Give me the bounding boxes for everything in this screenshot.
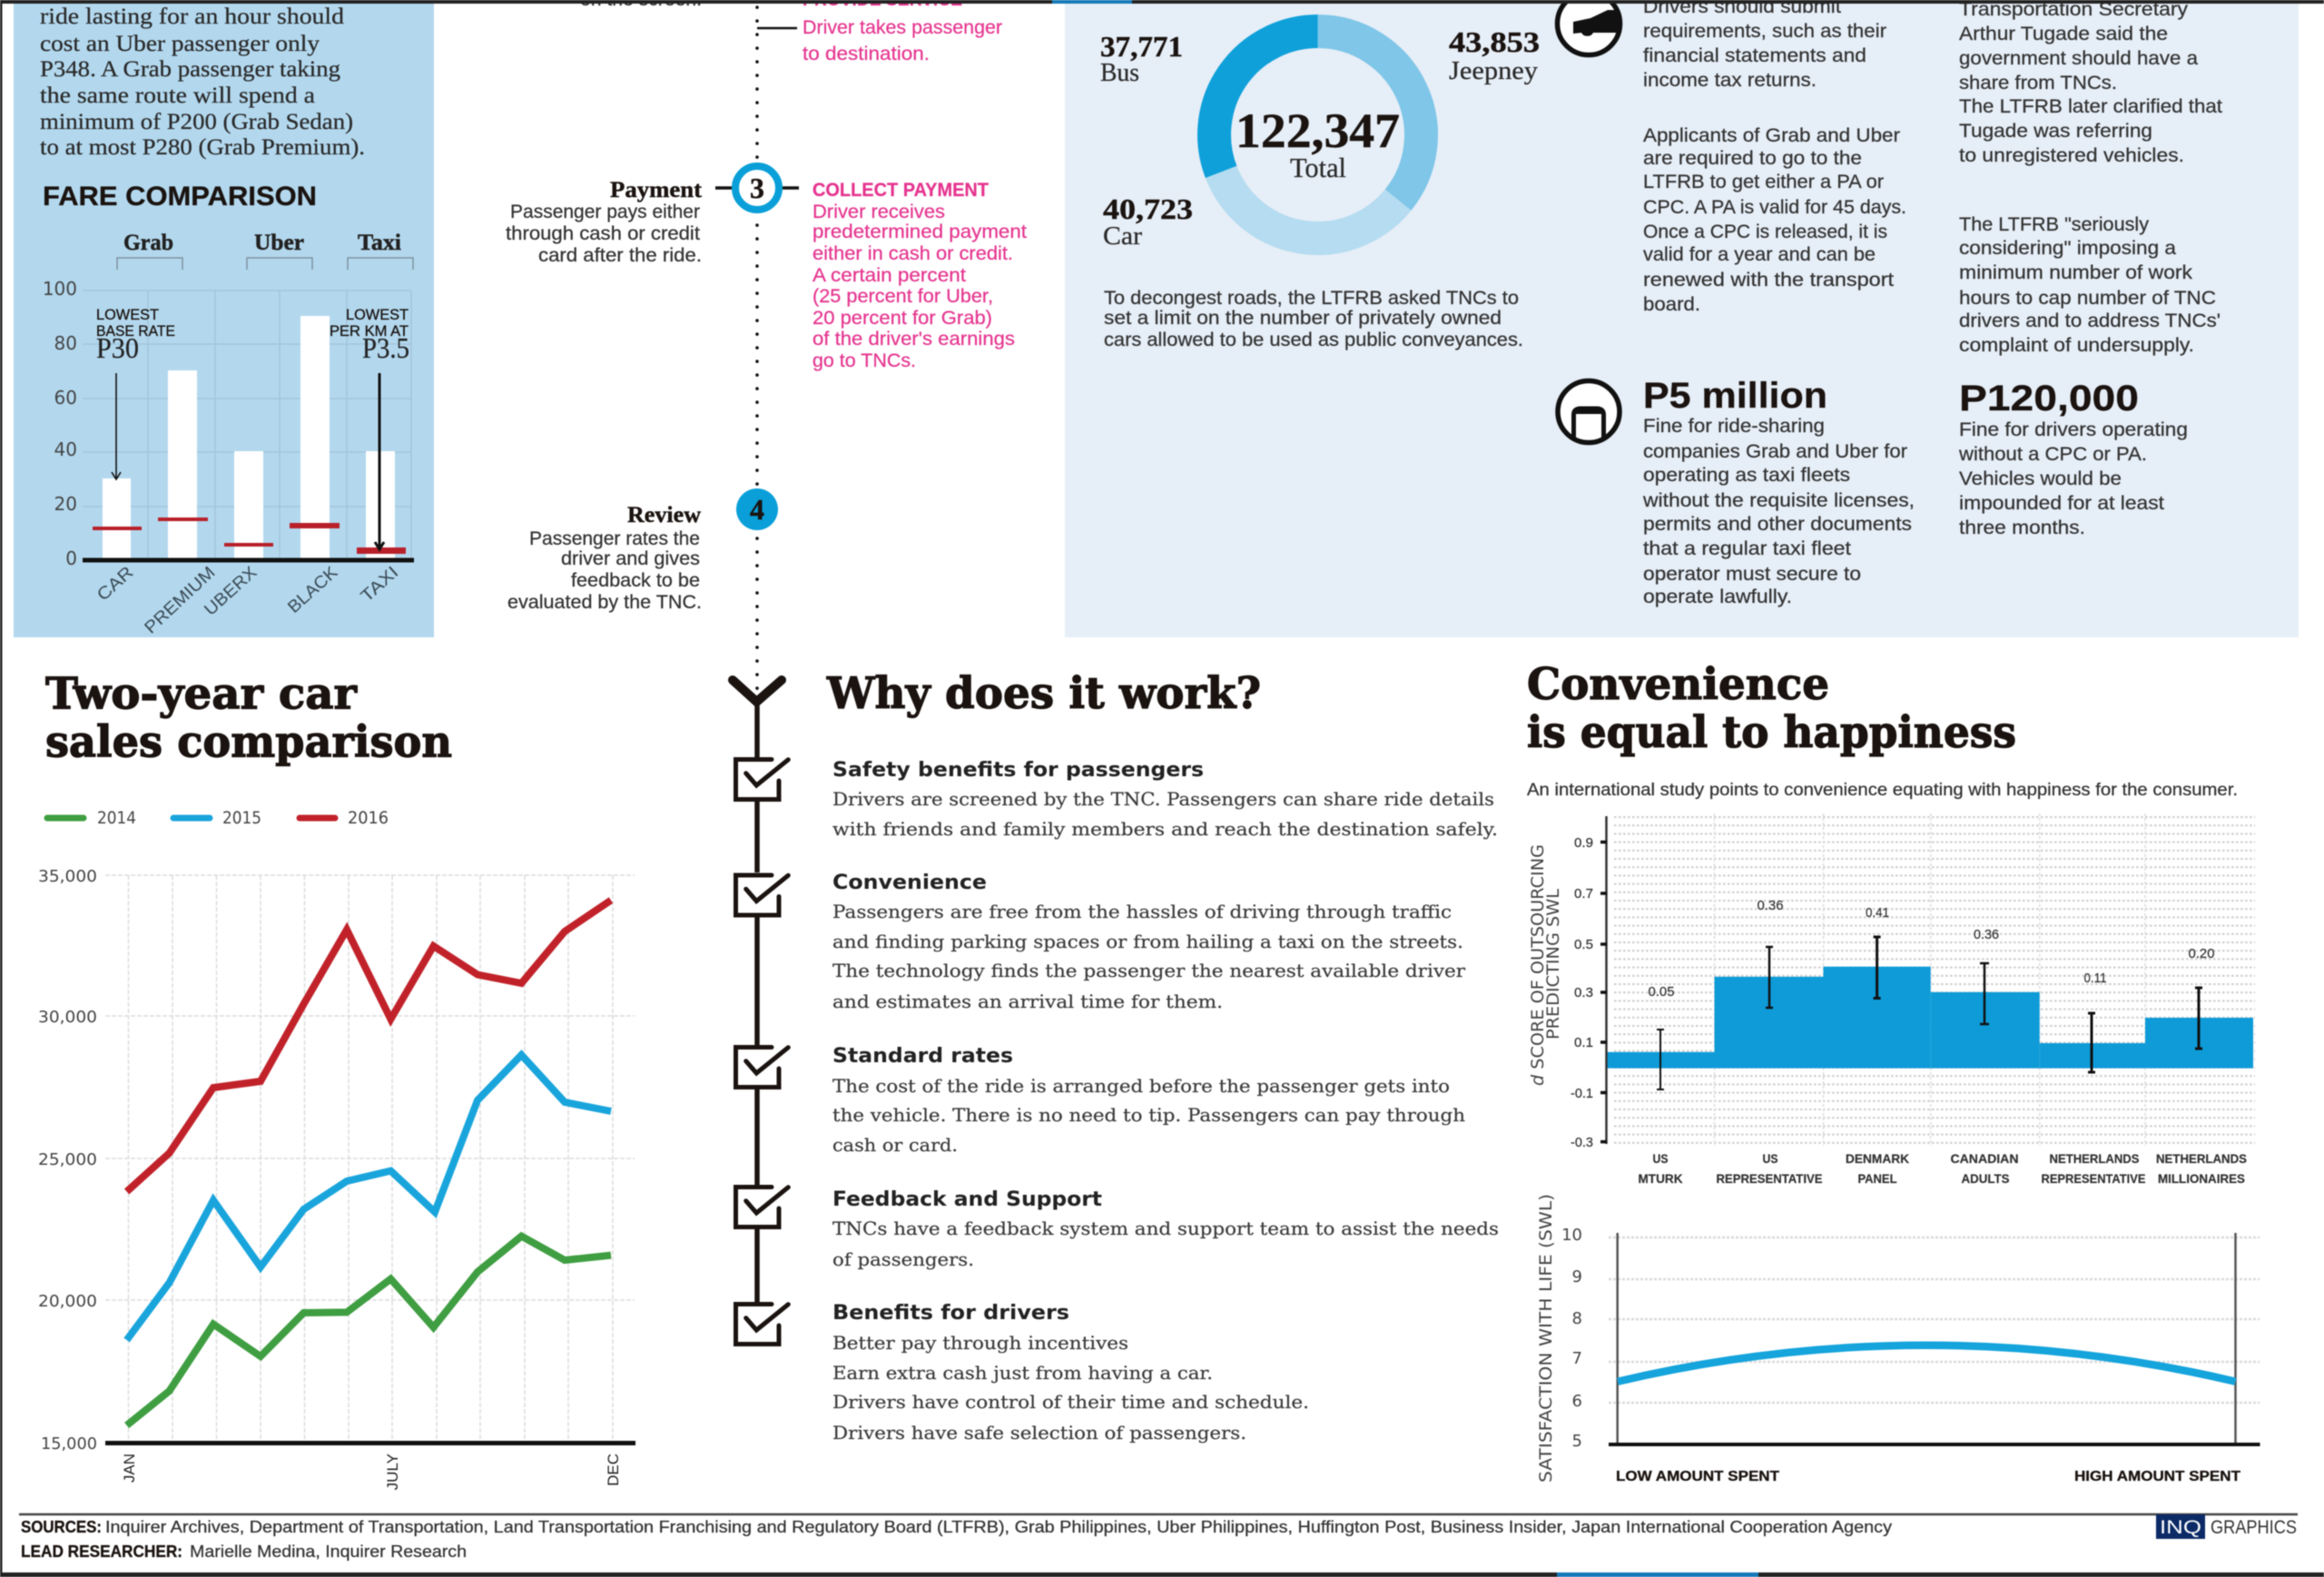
line chart: satisfaction with life: LOW AMOUNT SPENT [1616, 1469, 1779, 1484]
text: collect payment: 20 percent for Grab) [812, 308, 992, 329]
line chart: satisfaction with life [1536, 1194, 2260, 1484]
text: P5 million fine: companies Grab and Uber for [1643, 441, 1907, 462]
text: study intro: An international study points to convenience equating with happiness for the consumer. [1527, 781, 2238, 800]
text: review: driver and gives [561, 548, 700, 569]
text: standard rates: Standard rates [832, 1045, 1013, 1068]
bar chart: outsourcing score: CANADIAN [1950, 1151, 2019, 1166]
text: P120,000 fine: P120,000 [1959, 379, 2139, 419]
text: decongest roads: cars allowed to be used as public conveyances. [1104, 330, 1523, 350]
text: government share: The LTFRB "seriously [1959, 214, 2150, 235]
line chart: car sales: 25,000 [38, 1150, 97, 1169]
text: collect payment: predetermined payment [812, 222, 1027, 242]
text: government share: drivers and to address TNCs' [1959, 310, 2221, 331]
icon: check 5 [735, 1304, 788, 1344]
text: fare explanation: minimum of P200 (Grab Sedan) [40, 110, 353, 134]
bar chart: outsourcing score: 0.11 [2084, 971, 2106, 986]
text: convenience: and finding parking spaces or from hailing a taxi on the streets. [832, 931, 1463, 952]
bar chart: outsourcing score: 0.20 [2188, 946, 2215, 961]
text: decongest roads: To decongest roads, the LTFRB asked TNCs to [1104, 288, 1519, 309]
bar chart: fares: 100 [43, 278, 77, 300]
text: P5 million fine: without the requisite licenses, [1642, 490, 1915, 511]
bar chart: outsourcing score: REPRESENTATIVE [1716, 1171, 1823, 1186]
footer: sources: Marielle Medina, Inquirer Research [190, 1543, 467, 1561]
text: requirements: board. [1643, 294, 1700, 315]
bar chart: fares: 80 [54, 332, 77, 354]
heading: why does it work: Why does it work? [826, 668, 1261, 719]
icon: chevron and checklist spine [733, 680, 788, 1344]
text: decongest roads: set a limit on the number of privately owned [1104, 308, 1502, 329]
text: requirements: Once a CPC is released, it is [1643, 222, 1887, 242]
line chart: car sales: 20,000 [38, 1292, 97, 1311]
text: provide service: Driver takes passenger [803, 17, 1002, 38]
text: P5 million fine: P5 million [1643, 376, 1827, 416]
bar chart: outsourcing score: 0.7 [1574, 886, 1593, 902]
series: 2014 [127, 1237, 611, 1425]
bar chart: outsourcing score: MILLIONAIRES [2158, 1171, 2245, 1186]
bar chart: fares: BLACK [284, 563, 342, 617]
text: requirements: valid for a year and can be [1643, 244, 1876, 265]
bar chart: outsourcing score: US [1652, 1151, 1669, 1166]
text: P120,000 fine: three months. [1959, 517, 2085, 538]
legend: years: 2016 [348, 808, 389, 828]
text: review: Passenger rates the [529, 528, 700, 549]
bar chart: fares: UBERX [201, 563, 261, 620]
line chart: satisfaction with life: 8 [1572, 1309, 1582, 1328]
step 4 marker [736, 488, 778, 530]
bar chart: fares: CAR [94, 563, 137, 605]
bar chart: outsourcing score: 0.05 [1649, 984, 1674, 1000]
text: requirements: are required to go to the [1643, 148, 1862, 169]
bar chart: fares [43, 231, 414, 637]
text: benefits for drivers [832, 1302, 1309, 1444]
text: feedback and support: of passengers. [832, 1248, 974, 1270]
text: government share: to unregistered vehicles. [1959, 145, 2184, 166]
icon: check 3 [735, 1048, 788, 1088]
bar chart: outsourcing score: 0.5 [1574, 937, 1593, 952]
text: payment: Payment [610, 178, 703, 202]
text: fare explanation [40, 5, 365, 160]
text: review: Review [627, 503, 701, 527]
heading: convenience is equal to happiness: Convenience [1527, 659, 1829, 710]
heading: car sales [45, 668, 452, 768]
text: feedback and support [832, 1188, 1499, 1270]
line chart: car sales: JULY [384, 1454, 401, 1490]
legend: years [47, 808, 389, 828]
step 4 marker: 4 [750, 493, 764, 526]
donut chart: public vehicles: Car [1103, 222, 1142, 251]
footer: sources: LEAD RESEARCHER: [21, 1543, 182, 1561]
text: safety benefits: with friends and family members and reach the destination safely. [832, 818, 1498, 840]
footer: sources: SOURCES: [21, 1518, 102, 1536]
line chart: car sales: DEC [605, 1454, 622, 1486]
text: collect payment: COLLECT PAYMENT [812, 180, 989, 201]
line chart: satisfaction with life: 6 [1572, 1392, 1582, 1411]
bar chart: outsourcing score: REPRESENTATIVE [2041, 1171, 2146, 1186]
line chart: satisfaction with life: SATISFACTION WITH LIFE (SWL) [1536, 1194, 1556, 1483]
bar chart: outsourcing score: 0.41 [1866, 905, 1889, 921]
bar chart: outsourcing score: 0.3 [1574, 985, 1593, 1000]
bar chart: outsourcing score: DENMARK [1846, 1151, 1909, 1166]
text: collect payment: of the driver's earnings [812, 329, 1015, 350]
text: convenience [832, 872, 1465, 1012]
text: benefits for drivers: Better pay through incentives [832, 1332, 1128, 1354]
heading: convenience is equal to happiness [1527, 659, 2016, 758]
text: safety benefits [832, 759, 1498, 840]
footer: sources: Inquirer Archives, Department of Transportation, Land Transportation Franchising and Regulatory Board (LTFRB), Grab Philippines, Uber Philippines, Huffington Post, Business Insider, Japan International Cooperation Agency [105, 1518, 1892, 1536]
heading: car sales: Two-year car [45, 668, 358, 719]
text: requirements: financial statements and [1643, 45, 1866, 66]
text: benefits for drivers: Benefits for drivers [832, 1302, 1069, 1325]
text: government share: Tugade was referring [1959, 121, 2152, 142]
text: provide service [757, 0, 1002, 64]
bar chart: outsourcing score: 0.36 [1758, 898, 1783, 913]
bar chart: outsourcing score: PANEL [1857, 1171, 1897, 1186]
donut chart: public vehicles [1100, 25, 1540, 251]
icon: car side [1558, 0, 1620, 54]
text: government share: hours to cap number of TNC [1959, 288, 2216, 309]
text: P120,000 fine: Fine for drivers operating [1959, 419, 2188, 440]
line chart: car sales: JAN [121, 1454, 138, 1483]
icon: car front [1558, 381, 1620, 443]
bar chart: fares: P3.5 [362, 331, 409, 364]
text: government share: Arthur Tugade said the [1959, 24, 2168, 44]
text: P120,000 fine: impounded for at least [1959, 493, 2164, 514]
bar chart: outsourcing score: ADULTS [1961, 1171, 2010, 1186]
text: safety benefits: Drivers are screened by the TNC. Passengers can share ride details [832, 788, 1494, 810]
line chart: satisfaction with life: 7 [1572, 1349, 1582, 1368]
text: government share: The LTFRB later clarified that [1959, 96, 2222, 117]
bar chart: fares: 0 [65, 547, 77, 569]
bar chart: outsourcing score: US [1763, 1151, 1777, 1166]
bar chart: fares: LOWEST [96, 306, 159, 323]
bar chart: outsourcing score: -0.1 [1571, 1086, 1593, 1101]
text: requirements: requirements, such as their [1643, 21, 1886, 42]
bar chart: outsourcing score [1528, 813, 2255, 1186]
icon: check 1 [735, 759, 788, 799]
text: benefits for drivers: Earn extra cash just from having a car. [832, 1362, 1213, 1384]
bar chart: outsourcing score: d SCORE OF OUTSOURCING [1528, 844, 1548, 1086]
text: requirements: Applicants of Grab and Uber [1643, 125, 1900, 146]
heading: car sales: sales comparison [45, 717, 452, 768]
icon: check 4 [735, 1188, 788, 1227]
bar chart: outsourcing score: NETHERLANDS [2050, 1151, 2139, 1166]
arrow: lowest base rate [112, 373, 121, 479]
text: collect payment: (25 percent for Uber, [812, 286, 993, 307]
text: collect payment: Driver receives [812, 202, 945, 222]
bar chart: outsourcing score: 0.9 [1574, 835, 1593, 851]
legend: years: 2015 [222, 808, 261, 828]
text: convenience: and estimates an arrival time for them. [832, 991, 1223, 1012]
text: fare explanation: ride lasting for an hour should [40, 5, 345, 29]
donut chart: public vehicles: 37,771 [1100, 30, 1183, 63]
donut chart: public vehicles: 122,347 [1236, 103, 1400, 158]
step 3 marker: 3 [750, 172, 764, 204]
icon: check 2 [735, 875, 788, 915]
text: fare explanation: cost an Uber passenger only [40, 32, 320, 56]
text: P5 million fine: permits and other documents [1643, 514, 1912, 535]
bar chart: fares: Grab [123, 231, 173, 255]
bar chart: outsourcing score: NETHERLANDS [2156, 1151, 2247, 1166]
line chart: satisfaction with life: 5 [1572, 1432, 1582, 1451]
text: government share: considering" imposing a [1959, 238, 2176, 259]
text: P5 million fine: operate lawfully. [1643, 586, 1792, 607]
bar chart: outsourcing score: 0.36 [1974, 927, 1999, 942]
text: collect payment [812, 180, 1027, 371]
legend: years: 2014 [97, 808, 136, 828]
text: standard rates: The cost of the ride is arranged before the passenger gets into [832, 1075, 1450, 1097]
donut chart: public vehicles: Total [1290, 152, 1346, 183]
line chart: satisfaction with life: 9 [1572, 1267, 1582, 1286]
text: fare explanation: the same route will spend a [40, 84, 315, 108]
donut chart: public vehicles: Jeepney [1449, 56, 1539, 85]
series: 2015 [127, 1055, 611, 1340]
text: benefits for drivers: Drivers have safe selection of passengers. [832, 1422, 1246, 1444]
text: collect payment: go to TNCs. [812, 350, 916, 371]
text: benefits for drivers: Drivers have control of their time and schedule. [832, 1391, 1309, 1413]
logo: INQ Graphics: GRAPHICS [2211, 1517, 2297, 1538]
text: government share: minimum number of work [1959, 262, 2193, 283]
text: payment [506, 178, 703, 266]
bar chart: outsourcing score: MTURK [1638, 1171, 1683, 1186]
text: P120,000 fine [1958, 379, 2188, 538]
bar chart: fares: LOWEST [346, 306, 409, 323]
panel: regulation [1065, 0, 2299, 637]
bar chart: outsourcing score: PREDICTING SWL [1543, 889, 1563, 1040]
step 3 marker [715, 166, 799, 210]
heading: convenience is equal to happiness: is equal to happiness [1527, 707, 2016, 758]
text: requirements [1643, 0, 1906, 315]
line chart: satisfaction with life: HIGH AMOUNT SPENT [2074, 1469, 2240, 1484]
text: payment: through cash or credit [506, 223, 700, 244]
text: government share: government should have a [1959, 48, 2198, 69]
text: collect payment: either in cash or credit. [812, 243, 1013, 264]
arrow: lowest per km [375, 373, 384, 549]
text: government share: share from TNCs. [1959, 73, 2117, 94]
timeline: how the ride works [506, 0, 1027, 692]
bar chart: fares: Taxi [358, 231, 401, 255]
text: fare explanation: to at most P280 (Grab Premium). [40, 135, 365, 160]
text: fare explanation: P348. A Grab passenger taking [40, 57, 341, 82]
line chart: car sales: 15,000 [41, 1434, 97, 1454]
footer: sources [19, 1514, 2298, 1561]
bar chart: fares: 60 [54, 387, 77, 409]
text: requirements: renewed with the transport [1643, 270, 1894, 291]
text: convenience: Convenience [832, 872, 987, 894]
line chart: car sales: 35,000 [38, 867, 97, 886]
donut chart: public vehicles: Bus [1100, 58, 1139, 87]
text: government share: complaint of undersupply. [1959, 335, 2194, 356]
text: provide service: to destination. [803, 44, 930, 64]
line chart: car sales: 30,000 [38, 1008, 97, 1027]
heading: fare comparison: FARE COMPARISON [43, 182, 317, 212]
bar chart: fares: PER KM AT [330, 322, 409, 340]
bar chart: fares: TAXI [358, 563, 402, 606]
text: P5 million fine: operating as taxi fleets [1643, 465, 1850, 486]
text: review: feedback to be [571, 570, 700, 591]
donut chart: public vehicles: 40,723 [1103, 192, 1193, 225]
text: feedback and support: TNCs have a feedback system and support team to assist the needs [832, 1217, 1499, 1239]
donut chart: public vehicles: 43,853 [1449, 25, 1540, 58]
bar chart: fares: 40 [54, 439, 77, 460]
bar chart: fares: PREMIUM [141, 563, 219, 637]
text: P5 million fine [1642, 376, 1915, 607]
bar chart: fares: P30 [96, 331, 139, 364]
text: payment: Passenger pays either [510, 202, 700, 222]
text: convenience: Passengers are free from the hassles of driving through traffic [832, 901, 1452, 922]
series: 2016 [127, 901, 611, 1191]
text: P120,000 fine: Vehicles would be [1959, 468, 2122, 489]
bar chart: fares: Uber [254, 231, 304, 255]
text: requirements: income tax returns. [1643, 70, 1817, 91]
text: standard rates: the vehicle. There is no need to tip. Passengers can pay through [832, 1104, 1465, 1126]
line chart: car sales [38, 867, 635, 1490]
text: safety benefits: Safety benefits for passengers [832, 759, 1204, 782]
text: convenience: The technology finds the passenger the nearest available driver [832, 960, 1465, 981]
text: government share [1959, 0, 2222, 356]
bar chart: fares: BASE RATE [96, 322, 175, 340]
text: P5 million fine: operator must secure to [1643, 564, 1861, 585]
text: P5 million fine: that a regular taxi fleet [1643, 538, 1851, 559]
line chart: satisfaction with life: 10 [1561, 1226, 1582, 1245]
text: standard rates [832, 1045, 1465, 1156]
bar chart: fares: 20 [54, 493, 77, 515]
bar chart: outsourcing score: 0.1 [1574, 1035, 1593, 1050]
logo: INQ Graphics [2156, 1514, 2297, 1539]
text: review: evaluated by the TNC. [507, 592, 702, 613]
text: P120,000 fine: without a CPC or PA. [1958, 444, 2147, 465]
text: standard rates: cash or card. [832, 1134, 958, 1156]
text: decongest roads [1104, 288, 1523, 350]
text: requirements: CPC. A PA is valid for 45 days. [1643, 197, 1906, 218]
text: P5 million fine: Fine for ride-sharing [1643, 416, 1825, 437]
panel: fare comparison [14, 0, 434, 637]
logo: INQ Graphics: INQ [2160, 1517, 2201, 1538]
bar chart: outsourcing score: -0.3 [1571, 1135, 1593, 1150]
text: collect payment: A certain percent [812, 265, 966, 286]
text: review [507, 503, 702, 613]
text: feedback and support: Feedback and Support [832, 1188, 1103, 1211]
text: payment: card after the ride. [538, 245, 702, 266]
text: requirements: LTFRB to get either a PA or [1643, 172, 1884, 192]
